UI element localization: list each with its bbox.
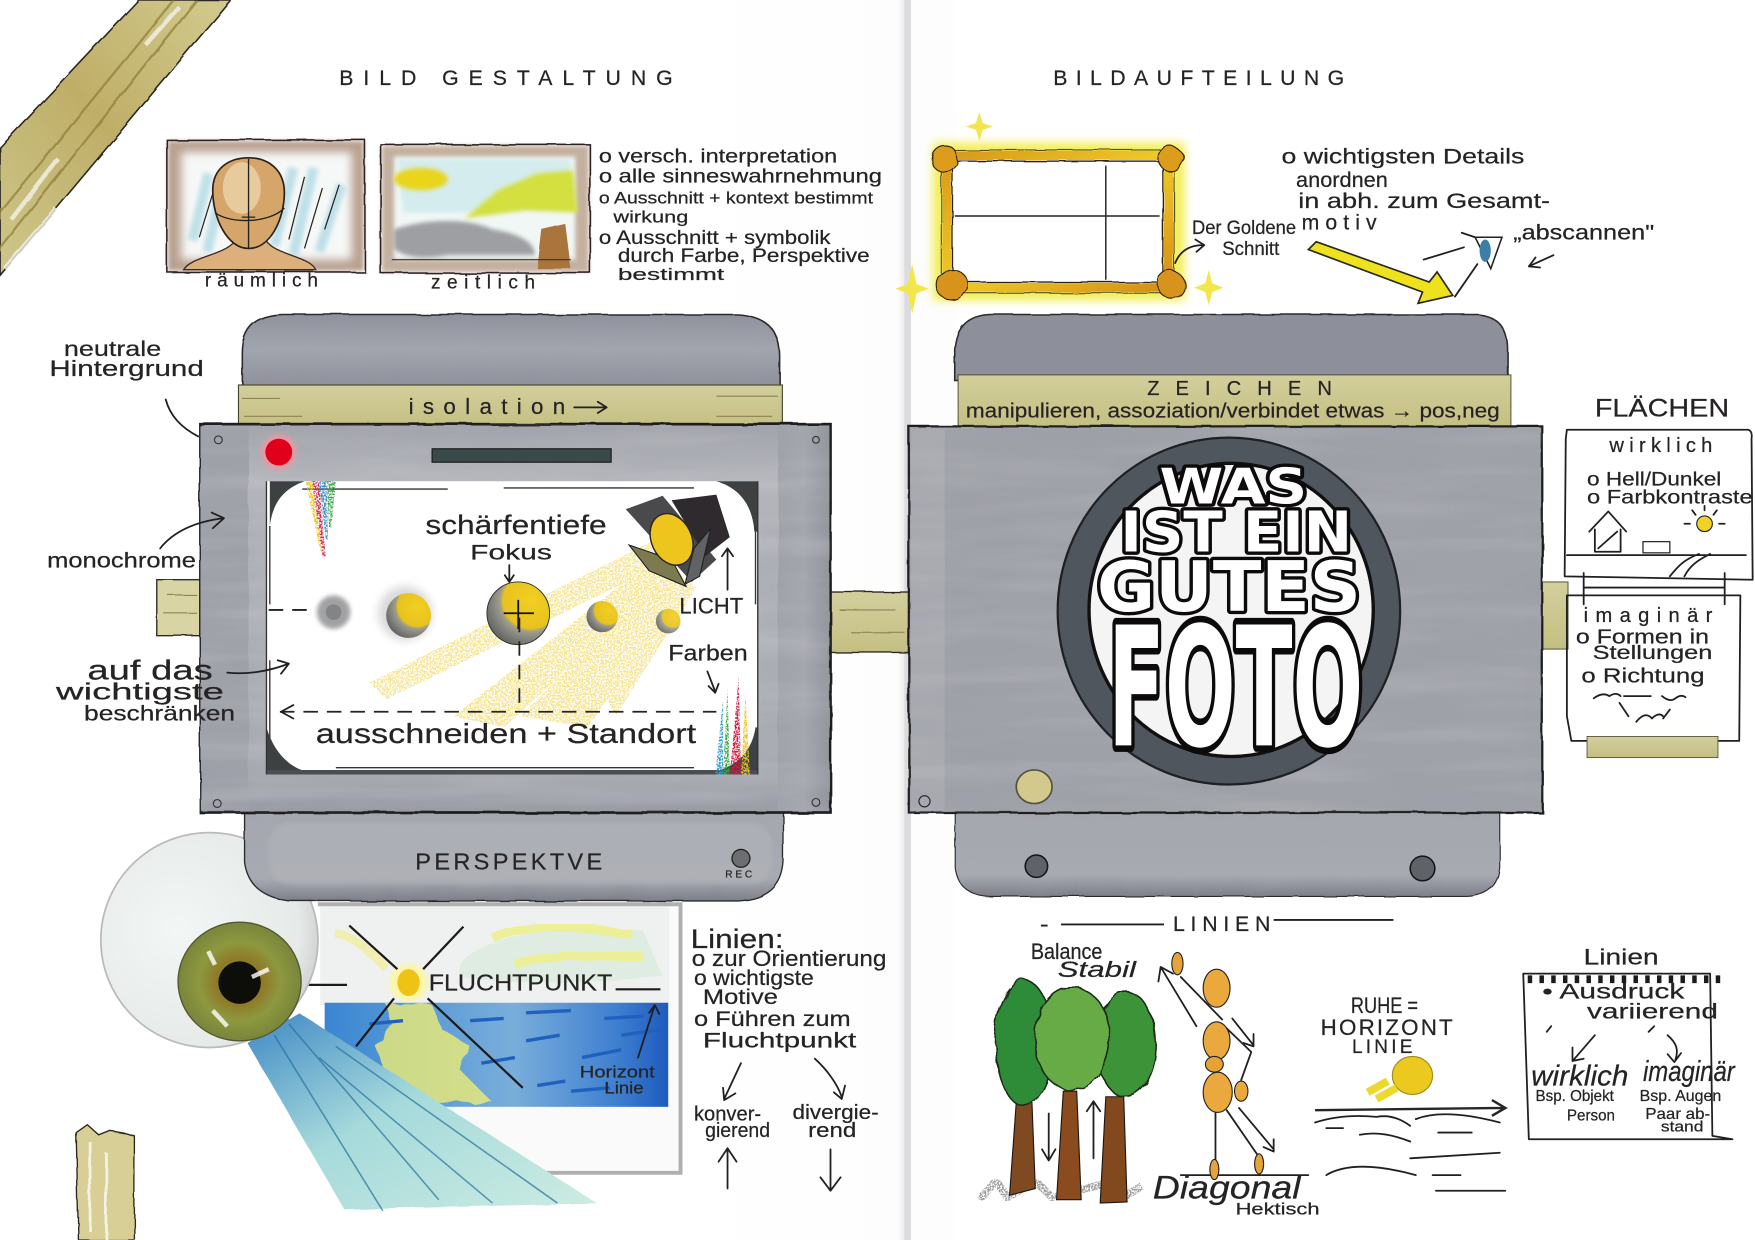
right camera band: Zeichen: manipulieren, assoziation/verbindet etwas → pos,neg <box>966 400 1500 422</box>
right camera body <box>909 426 1542 812</box>
eyeball <box>101 833 318 1048</box>
colour strips, bottom right <box>715 677 750 774</box>
car <box>394 221 535 257</box>
label: Horizont Linie <box>580 1005 659 1097</box>
card: wirklich: o Farbkontraste <box>1587 488 1753 509</box>
illustration: sunset over water horizon <box>1315 1056 1505 1191</box>
text: imaginaer <box>1640 1056 1736 1135</box>
text block: wichtigsten Details: anordnen <box>1296 168 1388 192</box>
annotation: auf das wichtigste beschraenken <box>54 654 289 726</box>
label: Fluchtpunkt: FLUCHTPUNKT <box>429 969 612 995</box>
label: Fokus <box>470 541 552 582</box>
text block: Linien bullets: Linien: <box>691 924 783 954</box>
label: Ruhe = Horizontlinie: RUHE = <box>1351 993 1418 1018</box>
annotation: monochrome: monochrome <box>47 548 196 572</box>
wood beam: top left corner <box>0 0 231 275</box>
text: Ausdruck variierend: • Ausdruck <box>1542 979 1685 1003</box>
panel: Flaechen <box>1565 395 1753 758</box>
sun reflection <box>375 1004 493 1102</box>
landscape picture: vanishing point <box>308 904 681 1173</box>
label: Horizont Linie: Horizont <box>580 1063 655 1082</box>
torso <box>1203 1022 1230 1060</box>
title: Bildgestaltung: BILD GESTALTUNG <box>339 66 673 90</box>
head <box>1203 969 1230 1007</box>
icon: golden frame, golden ratio <box>931 145 1184 300</box>
paper <box>1523 974 1733 1139</box>
label: räumlich <box>205 270 318 291</box>
label: Diagonal Hektisch: Hektisch <box>1236 1199 1320 1218</box>
label: Fokus: Fokus <box>470 541 552 565</box>
diagram: konvergierend and divergierend: konver- <box>694 1103 761 1125</box>
glow <box>940 150 1177 293</box>
annotation: neutrale Hintergrund <box>49 337 204 436</box>
paper frame <box>318 904 681 1173</box>
dashed guide lines <box>269 610 716 712</box>
balance arrows <box>1042 1101 1100 1161</box>
label: Ruhe = Horizontlinie: HORIZONT <box>1321 1015 1453 1040</box>
rain streaks <box>193 168 341 255</box>
label: Perspektive and REC: REC <box>725 869 752 880</box>
sun <box>1392 1056 1433 1095</box>
label: Horizont Linie: Linie <box>604 1078 644 1097</box>
beam of sight from the eye <box>247 1013 597 1211</box>
label: Diagonal Hektisch <box>1153 1170 1320 1218</box>
sky tint <box>397 159 571 213</box>
golden ratio lines <box>955 166 1160 280</box>
title in lens: Was ist ein gutes Foto <box>1097 458 1363 786</box>
label: Ausschneiden + Standort: ausschneiden + Standort <box>316 718 696 749</box>
spiral binding <box>1528 976 1724 983</box>
text: wirklich: Bsp. Objekt <box>1536 1088 1615 1105</box>
grass pencil <box>979 1181 1142 1200</box>
text: wirklich: wirklich <box>1531 1061 1628 1093</box>
frame and paper <box>381 144 590 273</box>
sparkles around frame <box>895 112 1223 313</box>
marker texture <box>200 424 830 812</box>
text: imaginaer: imaginär <box>1643 1056 1736 1088</box>
annotation: auf das wichtigste beschraenken: auf das <box>87 654 213 685</box>
text block: wichtigsten Details: o wichtigsten Details <box>1282 144 1524 168</box>
text: imaginaer: Bsp. Augen <box>1640 1088 1721 1105</box>
annotation: neutrale Hintergrund: Hintergrund <box>49 356 204 381</box>
arrow: crop direction <box>281 705 293 718</box>
icon: car box <box>1643 542 1670 553</box>
arrow: big yellow arrow <box>1308 242 1453 303</box>
light beams <box>369 543 696 727</box>
screen <box>266 481 758 774</box>
label: Perspektive and REC <box>415 849 752 880</box>
annotation: auf das wichtigste beschraenken: beschränken <box>84 702 235 726</box>
text block: Bildgestaltung bullet list: o alle sinneswahrnehmung <box>599 166 882 187</box>
horizon arrow <box>1315 1100 1505 1116</box>
lens ring <box>1058 438 1400 785</box>
picture: raeumlich, head study <box>167 140 365 291</box>
focus balls <box>317 595 350 629</box>
label: Balance Stabil <box>1031 939 1137 982</box>
diagram: konvergierend and divergierend: divergie- <box>792 1102 879 1124</box>
panel: notebook Linien: variierend <box>1587 999 1718 1023</box>
text block: Linien bullets: o Führen zum <box>694 1007 851 1031</box>
label: zeitlich <box>431 273 535 294</box>
label: Farben <box>668 640 748 693</box>
text block: Bildgestaltung bullet list: bestimmt <box>618 265 725 284</box>
text block: Linien bullets: Fluchtpunkt <box>703 1029 856 1053</box>
icon: birds <box>1594 694 1686 722</box>
text block: Bildgestaltung bullet list: o Ausschnitt + symbolik <box>599 228 831 249</box>
label: Farben: Farben <box>668 640 748 665</box>
text block: wichtigsten Details: in abh. zum Gesamt- <box>1298 189 1550 213</box>
diagram: konvergierend and divergierend <box>694 1059 879 1191</box>
sun <box>394 168 448 190</box>
text: wirklich: Person <box>1567 1107 1615 1124</box>
text block: Bildgestaltung bullet list: durch Farbe, Perspektive <box>618 246 870 267</box>
tree crown <box>465 170 578 218</box>
frame and paper <box>167 140 365 272</box>
heading: Linien with rules <box>1041 912 1393 936</box>
text block: Bildgestaltung bullet list <box>599 146 882 284</box>
annotation: Der Goldene Schnitt <box>1175 218 1296 263</box>
card: imaginaer: o Formen in <box>1576 627 1709 649</box>
shutter button <box>1016 770 1052 804</box>
panel: notebook Linien <box>1523 945 1736 1139</box>
crowns <box>995 980 1156 1106</box>
head and shoulders <box>184 237 316 270</box>
card: wirklich: wirklich <box>1608 435 1712 457</box>
pupil <box>218 961 261 1004</box>
title in lens: Was ist ein gutes Foto: FOTO <box>1108 593 1363 786</box>
annotation: auf das wichtigste beschraenken: wichtigste <box>54 678 224 704</box>
left camera body <box>200 424 830 812</box>
illustration: three trees <box>979 980 1156 1203</box>
label: Balance Stabil: Balance <box>1031 939 1102 964</box>
iris <box>178 922 301 1041</box>
strap: right side of right camera <box>1539 582 1568 649</box>
clouds <box>336 927 663 983</box>
label: Perspektive and REC: PERSPEKTVE <box>415 849 602 875</box>
sky <box>320 906 669 1005</box>
text block: Bildgestaltung bullet list: wirkung <box>612 208 688 227</box>
ornaments <box>931 145 1184 300</box>
left camera band: Isolation: isolation <box>409 394 565 419</box>
icon: small scanning eye <box>1424 233 1502 297</box>
heading: Linien <box>1584 945 1659 970</box>
card: imaginaer <box>1567 573 1740 741</box>
label: Schaerfentiefe: schärfentiefe <box>425 510 607 540</box>
right camera band: Zeichen: ZEICHEN <box>1147 378 1332 400</box>
casing <box>200 424 830 812</box>
hand <box>1172 952 1183 975</box>
title in lens: Was ist ein gutes Foto: IST EIN <box>1120 501 1352 566</box>
text block: Linien bullets <box>691 924 886 1053</box>
trunks <box>1010 1102 1035 1195</box>
annotation: Der Goldene Schnitt: Schnitt <box>1222 239 1280 260</box>
card: imaginaer: Stellungen <box>1593 643 1712 664</box>
focus cross <box>504 600 534 629</box>
text block: wichtigsten Details <box>1282 144 1550 234</box>
text block: Bildgestaltung bullet list: o versch. interpretation <box>599 146 837 167</box>
icon: small sun <box>1697 516 1712 532</box>
text: wirklich <box>1531 1061 1628 1124</box>
text block: Linien bullets: o wichtigste <box>694 966 814 990</box>
label: Ruhe = Horizontlinie <box>1321 993 1453 1058</box>
title in lens: Was ist ein gutes Foto: GUTES <box>1097 548 1361 628</box>
vanishing lines <box>308 926 660 1088</box>
heading: Linien with rules: LINIEN <box>1173 912 1270 936</box>
label: Diagonal Hektisch: Diagonal <box>1153 1170 1301 1206</box>
right camera top section <box>955 314 1508 381</box>
screw <box>919 796 930 807</box>
text: imaginaer: Paar ab- <box>1645 1106 1710 1123</box>
tree trunk <box>537 224 571 269</box>
text block: wichtigsten Details: motiv <box>1302 210 1377 234</box>
picture: zeitlich, moving car <box>381 144 590 294</box>
casing <box>909 426 1542 812</box>
left camera top section <box>242 314 780 392</box>
screws <box>214 436 222 444</box>
text: imaginaer: stand <box>1661 1119 1703 1135</box>
frame <box>947 156 1168 288</box>
wave marks <box>369 1011 660 1091</box>
annotation: Der Goldene Schnitt: Der Goldene <box>1192 218 1296 239</box>
icon: house <box>1589 511 1626 552</box>
icon: big green eye <box>101 833 318 1048</box>
diagonal arrows <box>1158 967 1274 1152</box>
card: imaginaer: o Richtung <box>1581 666 1705 688</box>
sea <box>325 1003 668 1107</box>
slot <box>432 449 611 462</box>
right camera band: Zeichen <box>958 375 1511 426</box>
marker texture <box>909 426 1542 812</box>
label: Ruhe = Horizontlinie: LINIE <box>1352 1037 1412 1058</box>
ground and road <box>1567 554 1746 576</box>
card: imaginaer: imaginär <box>1584 605 1713 627</box>
limbs <box>1181 977 1308 1175</box>
tape under card <box>1587 736 1718 758</box>
illustration: wooden figure, diagonal <box>1158 952 1308 1180</box>
annotation: abscannen: „abscannen" <box>1513 220 1654 244</box>
annotation: neutrale Hintergrund: neutrale <box>64 337 161 361</box>
left camera band: Isolation <box>238 385 782 428</box>
sun flare <box>1368 1081 1397 1099</box>
text block: Linien bullets: Motive <box>703 985 778 1009</box>
card: wirklich <box>1565 430 1753 580</box>
label: Balance Stabil: Stabil <box>1058 957 1137 982</box>
highlights <box>208 951 269 1026</box>
sun <box>390 964 428 1002</box>
diagram: konvergierend and divergierend: gierend <box>705 1120 770 1142</box>
diagram: konvergierend and divergierend: rend <box>808 1120 856 1142</box>
label: Licht: LICHT <box>679 593 744 618</box>
colour strips, top left <box>306 481 336 556</box>
label: Licht <box>679 548 744 618</box>
strap: left camera side straps <box>157 580 911 652</box>
annotation: monochrome <box>47 513 224 572</box>
title: Bildaufteilung: BILDAUFTEILUNG <box>1053 66 1344 90</box>
left camera bottom section <box>244 811 783 901</box>
icon: spotlight <box>626 495 730 586</box>
card: wirklich: o Hell/Dunkel <box>1587 470 1721 491</box>
record light <box>261 434 297 470</box>
water lines <box>1315 1114 1505 1191</box>
wood post: bottom left <box>76 1125 134 1240</box>
right camera bottom section <box>955 811 1500 896</box>
arrows <box>1547 1026 1681 1062</box>
heading: FLÄCHEN <box>1595 395 1729 422</box>
text block: Linien bullets: o zur Orientierung <box>692 946 886 971</box>
text block: Bildgestaltung bullet list: o Ausschnitt + kontext bestimmt <box>599 189 873 208</box>
title in lens: Was ist ein gutes Foto: WAS <box>1160 458 1307 516</box>
annotation: abscannen <box>1513 220 1654 267</box>
